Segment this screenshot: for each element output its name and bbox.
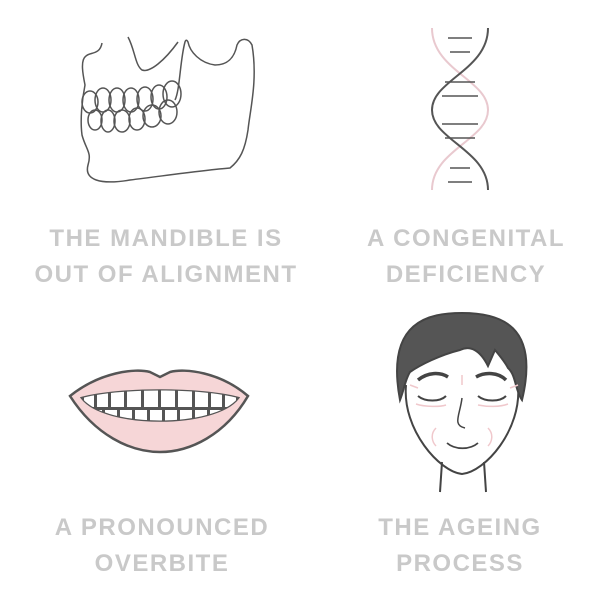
- icon: jaw: [81, 37, 254, 182]
- heading: overbite: OVERBITE: [95, 550, 229, 577]
- heading: overbite: A PRONOUNCED: [55, 514, 269, 541]
- heading: congenital: A CONGENITAL: [367, 225, 565, 252]
- icon: dna: [432, 28, 488, 190]
- heading: mandible: OUT OF ALIGNMENT: [34, 261, 298, 288]
- heading: ageing: [378, 514, 542, 577]
- heading: ageing: THE AGEING: [378, 514, 542, 541]
- heading: ageing: PROCESS: [396, 550, 524, 577]
- heading: overbite: [55, 514, 269, 577]
- heading: congenital: [367, 225, 565, 288]
- heading: mandible: THE MANDIBLE IS: [49, 225, 283, 252]
- icon: face: [397, 313, 526, 492]
- heading: mandible: [34, 225, 298, 288]
- heading: congenital: DEFICIENCY: [386, 261, 546, 288]
- icon: lips: [70, 371, 248, 452]
